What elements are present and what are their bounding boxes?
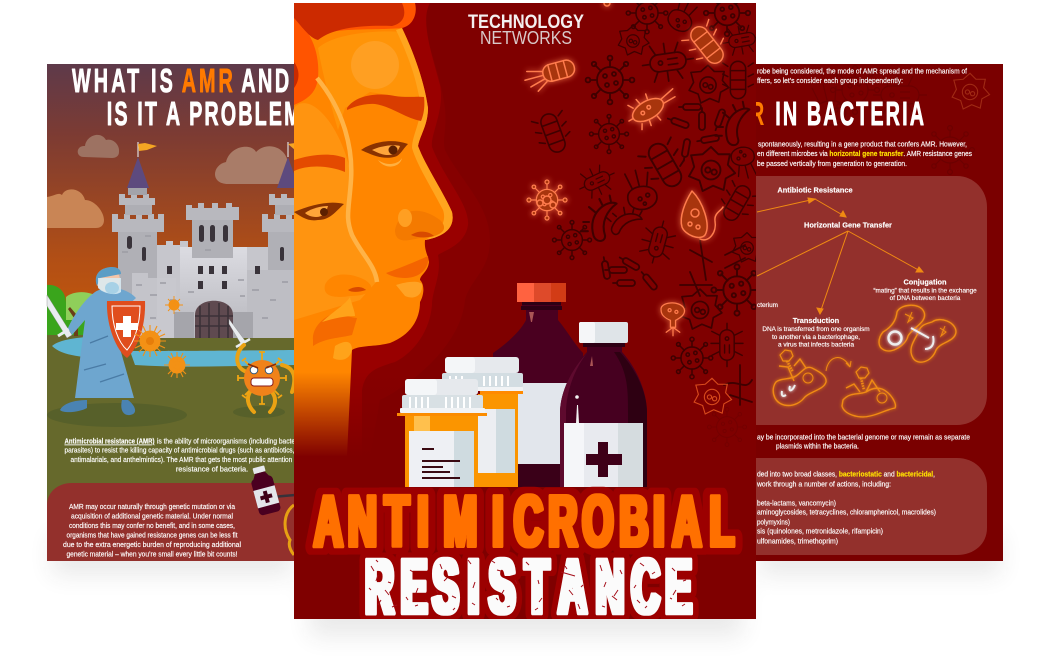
paragraph: AMR definition: is the ability of microorganisms (including bacte: [157, 436, 295, 446]
right bottle cap: [579, 322, 628, 343]
antimicrobial lettering: ANTIMICROBIAL: [314, 482, 734, 562]
front hair: [294, 3, 416, 36]
label: transduction: Transduction: [793, 316, 840, 325]
logo: Technology Networks: NETWORKS: [480, 28, 572, 48]
paragraph: plasmids: ay be incorporated into the bacterial genome or may remain as separate: [757, 432, 970, 442]
back face eye: [294, 203, 344, 220]
forehead highlight: [351, 41, 399, 89]
heading: what is AMR and why is it a problem: [72, 62, 301, 132]
paragraph: how AMR occurs: AMR may occur naturally through genetic mutation or via: [69, 502, 236, 511]
classes text: polymyxins): [757, 518, 790, 526]
logo: Technology Networks: TECHNOLOGY: [468, 11, 584, 33]
classes text: ulfonamides, trimethoprim): [757, 536, 838, 546]
conjugation cells illustration: [879, 305, 956, 362]
paragraph: AMR definition: parasites) to resist the killing capacity of antimicrobial drugs (such as antibiotics,: [64, 446, 294, 454]
classes text: sis (quinolones, metronidazole, rifampicin): [757, 526, 883, 536]
logo: Technology Networks: [468, 14, 584, 44]
river: [52, 337, 294, 367]
paragraph: AMR definition: antimalarials, and anthelmintics). The AMR that gets the most public attention i: [70, 455, 296, 464]
classes text: beta-lactams, vancomycin): [757, 498, 836, 508]
back face profile stripe: [317, 78, 377, 282]
front hair dark: [294, 3, 404, 40]
heading: what is AMR and why is it a problem: AND: [241, 62, 289, 99]
paragraph: how AMR occurs: genetic material – when you’re small every little bit counts!: [66, 550, 238, 558]
angry bacterium with sword: [229, 319, 294, 418]
paragraph: plasmids: plasmids within the bacteria.: [776, 442, 859, 450]
title: antimicrobial: [314, 482, 734, 562]
microbes: glowing orange highlights: [523, 0, 733, 336]
classes text: aminoglycosides, tetracyclines, chloramphenicol, macrolides): [757, 508, 936, 516]
intro paragraph: spontaneously, resulting in a gene product that confers AMR. However,: [758, 140, 967, 148]
back face cheek: [294, 103, 378, 320]
orange virus 3: [165, 296, 183, 314]
label: conjugation: “mating” that results in the exchange: [873, 288, 977, 294]
faint microbe background pattern: [812, 66, 974, 174]
castle left tower: [112, 142, 164, 320]
left page sky background: [47, 64, 295, 344]
classes text: ded into two broad classes, bacteriostatic and bactericidal,: [757, 470, 935, 478]
back face hair shadow: [294, 62, 298, 88]
orange virus 2: [164, 352, 190, 378]
back face hair: [294, 20, 318, 105]
face forehead edge highlight: [396, 28, 453, 240]
left page ground: [47, 335, 295, 561]
panel: antibiotic classes: [755, 458, 987, 555]
distressed texture on resistance: [369, 560, 686, 610]
title: resistance: [366, 543, 691, 629]
lips: [386, 256, 428, 278]
label: horizontal gene transfer: Horizontal Gene Transfer: [804, 220, 892, 230]
back face nostril: [348, 287, 366, 292]
paragraph: AMR definition: resistance of bacteria.: [176, 464, 248, 474]
eyebrow: [347, 94, 424, 121]
bacterium spikes: [238, 352, 286, 404]
back face eyebrow: [294, 155, 345, 172]
antimicrobial halo: ANTIMICROBIAL: [314, 482, 734, 562]
castle back wall: [132, 241, 295, 338]
paragraph: AMR definition: Antimicrobial resistance (AMR): [64, 436, 155, 446]
pill bottle label: [409, 431, 474, 487]
paragraph: plasmids: [757, 432, 970, 450]
back pill bottle: [442, 357, 523, 487]
cross icon: [586, 442, 622, 477]
label: conjugation: Conjugation: [903, 278, 947, 286]
robe: [68, 288, 136, 398]
label: transduction: [762, 316, 870, 348]
feet: [60, 400, 135, 415]
top paragraph: robe being considered, the mode of AMR spread and the mechanism of: [757, 66, 968, 76]
outer face halo: [294, 3, 490, 456]
fade to background: [294, 378, 362, 456]
label: transduction: DNA is transferred from one organism: [762, 326, 870, 333]
knight: [47, 267, 145, 415]
faint microbe: [707, 407, 747, 447]
label: bacterium fragment: cterium: [757, 302, 778, 309]
castle gate: [195, 301, 233, 338]
orange virus 1: [134, 325, 166, 357]
dark medicine bottle: [493, 283, 583, 487]
top paragraph: [757, 66, 968, 85]
heading: AMR in bacteria: R: [750, 95, 765, 132]
paragraph: how AMR occurs: organisms that have gained resistance genes can be less fit: [66, 530, 238, 540]
orange bug fragment: [285, 505, 294, 555]
heading: what is AMR and why is it a problem: AMR: [182, 62, 233, 99]
diagram background: [755, 176, 987, 425]
right page background: [755, 64, 1003, 561]
faces illustration: [294, 3, 468, 452]
top paragraph: ffers, so let’s consider each group independently:: [757, 76, 903, 85]
shield: [107, 301, 145, 358]
intro paragraph: be passed vertically from generation to generation.: [757, 159, 907, 168]
heading: what is AMR and why is it a problem: WHAT IS: [72, 62, 173, 99]
classes background: [755, 458, 987, 555]
nostril: [411, 232, 434, 237]
label: antibiotic resistance: Antibiotic Resistance: [777, 186, 853, 194]
microbes: dark outline pattern: [531, 0, 763, 405]
classes text: [756, 470, 936, 546]
back face lips: [313, 297, 357, 360]
castle: [112, 142, 308, 338]
heading: AMR in bacteria: IN BACTERIA: [775, 95, 924, 132]
bacterium arms and legs: [237, 345, 294, 412]
panel: horizontal gene transfer diagram: [755, 176, 987, 425]
castle right tower: [262, 142, 308, 310]
resistance lettering: RESISTANCE: [366, 543, 691, 629]
cover background: [294, 3, 756, 619]
bacterium sword: [229, 319, 246, 344]
paragraph: AMR definition: [64, 436, 296, 474]
sword: [47, 295, 72, 338]
diagram arrows: [757, 198, 923, 314]
classes text: work through a number of actions, including:: [756, 480, 891, 488]
label: conjugation: of DNA between bacteria: [890, 295, 961, 302]
paragraph: how AMR occurs: acquisition of additional genetic material. Under normal: [71, 512, 233, 520]
paragraph: how AMR occurs: [63, 502, 241, 558]
label: transduction: to another via a bacteriophage,: [772, 334, 860, 341]
back face nose: [325, 275, 371, 297]
right medicine bottle: [560, 322, 647, 487]
right bottle label: [584, 423, 618, 487]
label: transduction: a virus that infects bacteria: [778, 342, 854, 348]
panel: what is AMR (left page): [47, 62, 308, 561]
red text panel: [47, 483, 295, 561]
front pill bottle: [397, 379, 487, 487]
paragraph: how AMR occurs: due to the extra energetic burden of reproducing additional: [63, 540, 241, 549]
head: [96, 268, 120, 292]
eye: [361, 141, 408, 167]
bacterium eyes and mouth: [250, 366, 258, 374]
panel: front cover (centre page): [294, 0, 763, 629]
front face: [294, 27, 453, 456]
castle central keep: [186, 203, 239, 261]
label: conjugation: [873, 278, 977, 302]
ground shadow under knight: [47, 403, 187, 427]
paragraph: how AMR occurs: conditions this may confer no benefit, and in some cases,: [69, 521, 235, 530]
panel: AMR in bacteria (right page): [750, 64, 1003, 561]
star microbe icon: [952, 73, 990, 109]
dim orange microbe: [694, 378, 732, 414]
inner face halo: [349, 3, 468, 420]
bottle cap: [517, 283, 566, 302]
transduction cells illustration: [773, 350, 895, 417]
intro paragraph: [757, 140, 972, 168]
resistance halo: RESISTANCE: [366, 543, 691, 629]
bushes and tree: [47, 285, 104, 336]
heading: what is AMR and why is it a problem: IS IT A PROBLEM: [107, 95, 301, 132]
castle front wall with gate: [122, 236, 295, 338]
nose shading: [395, 211, 444, 240]
clouds: [47, 135, 288, 228]
intro paragraph: en different microbes via horizontal gene transfer. AMR resistance genes: [757, 149, 972, 158]
upper face lighter area: [318, 31, 418, 130]
bottle with arm: [248, 464, 295, 516]
drop shadows: [52, 535, 1000, 636]
chin highlight: [396, 282, 422, 298]
